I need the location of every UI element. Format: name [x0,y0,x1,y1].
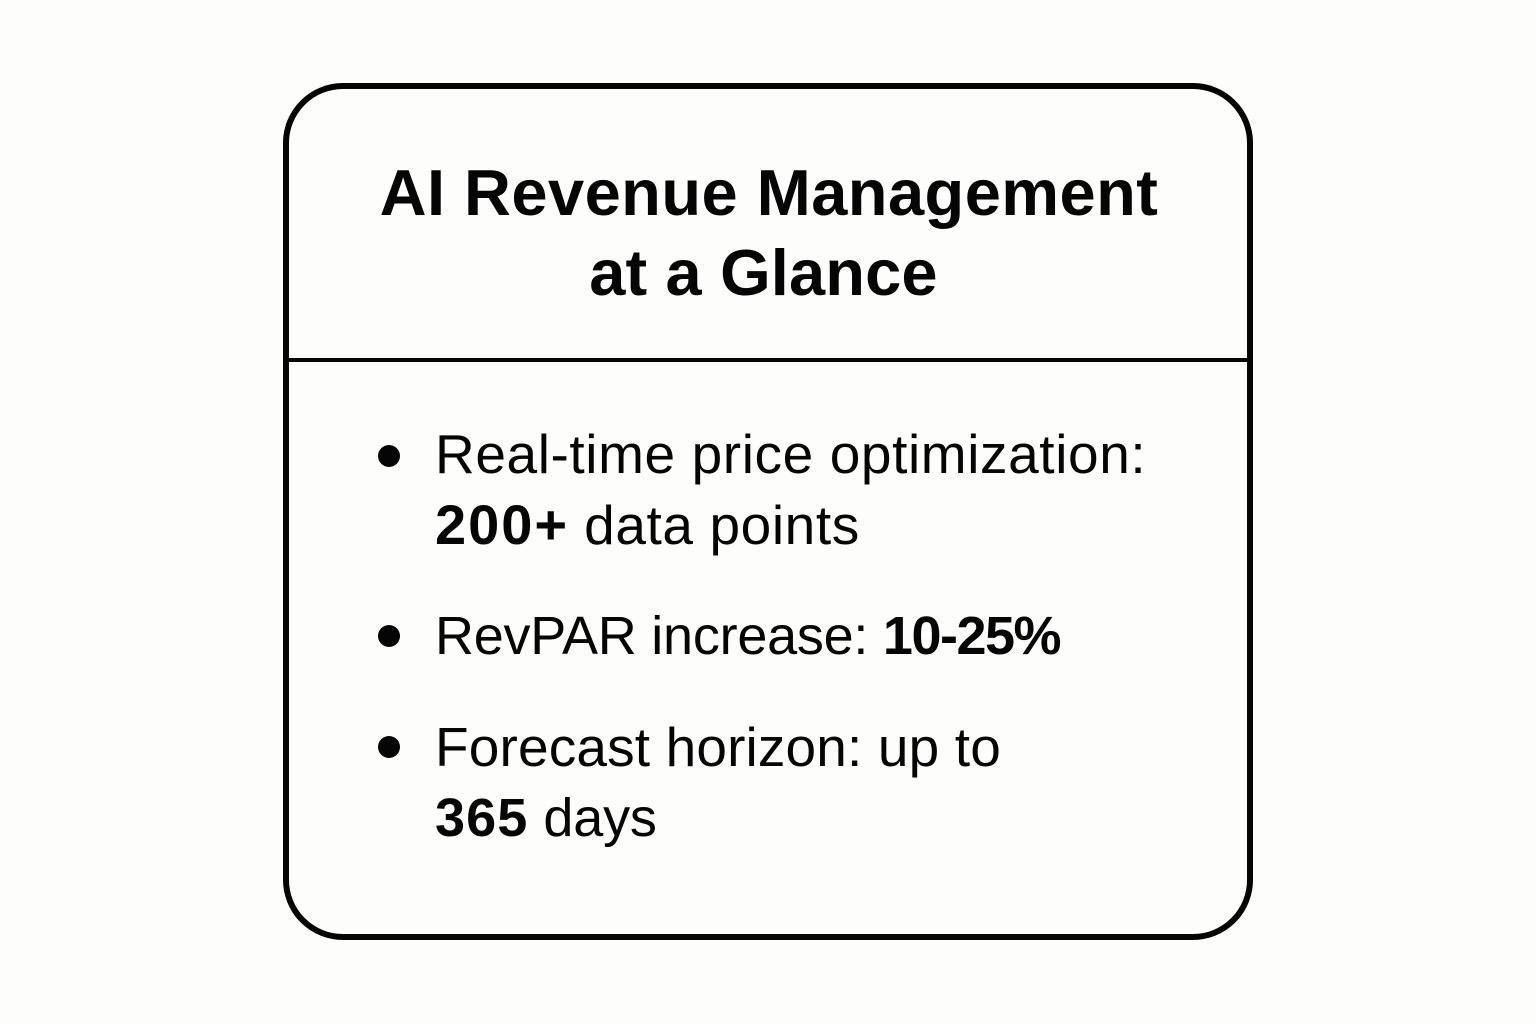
bullet 3: forecast horizon [378,716,1001,848]
bullet dot [378,445,400,467]
bullet 1: price optimization [378,423,1146,556]
card outline [283,83,1253,940]
title [380,156,1158,309]
bullet text [435,716,1001,848]
title: AI Revenue Management [380,156,1158,229]
bullet text: 200+ data points [435,493,860,556]
bullet text [435,423,1146,556]
bullet text: 365 days [435,788,657,848]
panel: summary card [283,83,1253,940]
bullet text: Real-time price optimization: [435,423,1146,485]
bullet text: Forecast horizon: up to [435,716,1001,778]
bullet dot [378,736,400,758]
bullet dot [378,625,400,647]
divider line [288,358,1248,362]
title: at a Glance [589,236,938,309]
bullet 2: RevPAR increase [378,606,1060,666]
bullet text: RevPAR increase: 10-25% [435,606,1060,666]
